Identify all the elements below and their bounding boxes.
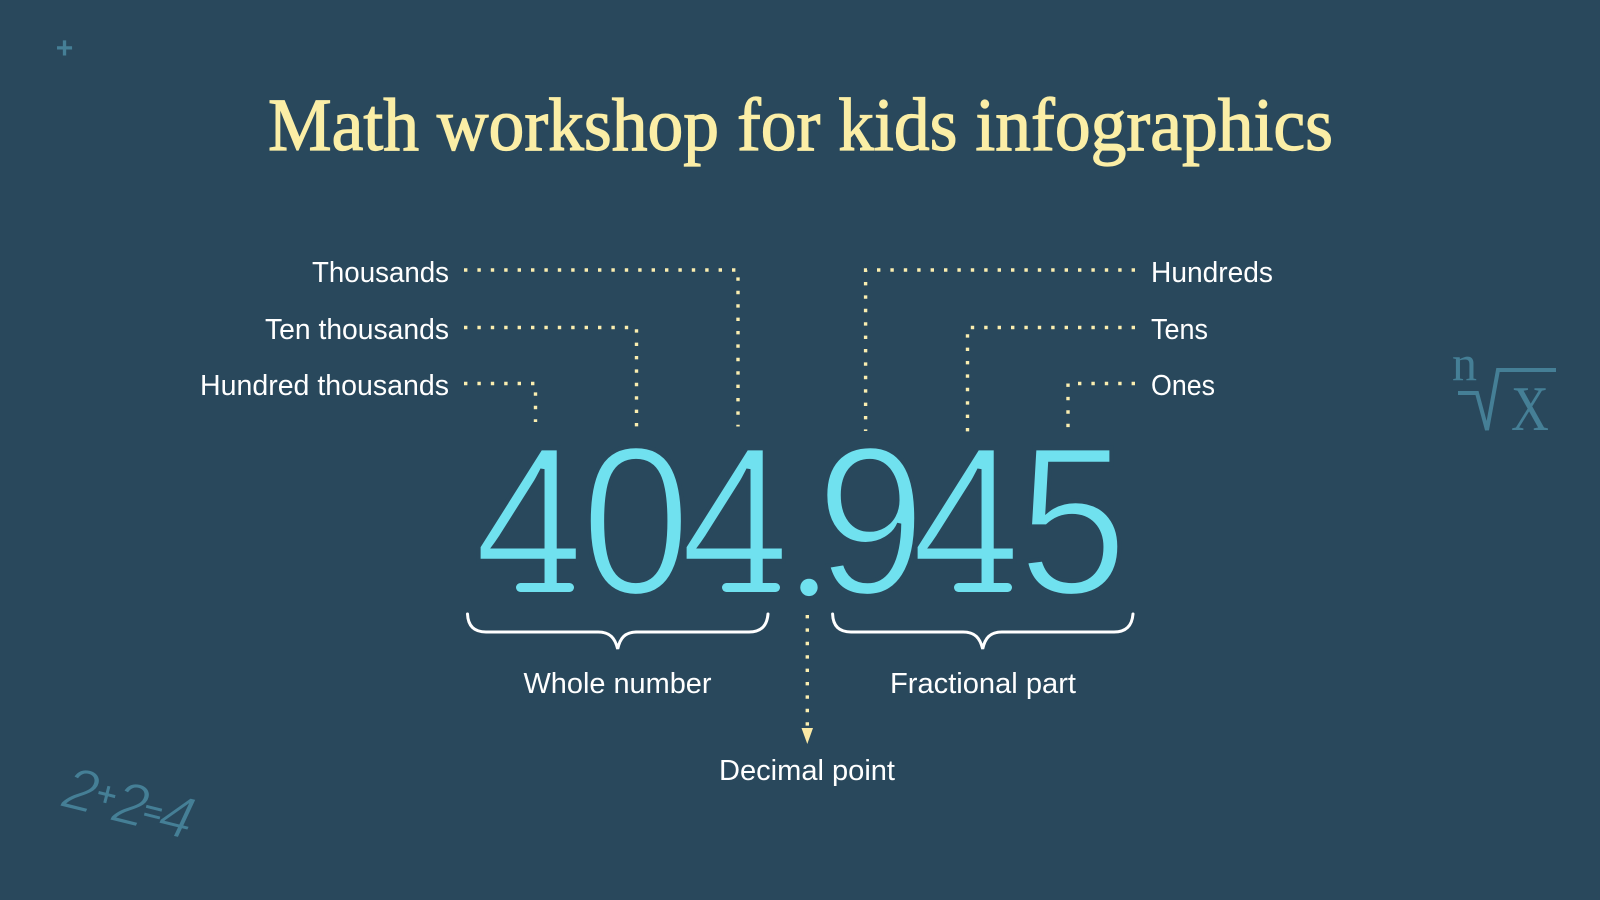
title: Math workshop for kids infographics (268, 84, 1333, 167)
big number 404.945: 5 (1018, 403, 1128, 640)
big number 404.945: 4 (680, 403, 790, 640)
brace: fractional part (833, 614, 1133, 649)
arrow: decimal point (802, 615, 813, 744)
icon: 2+2=4 decoration (56, 753, 201, 853)
label: ones: Ones (1151, 370, 1215, 402)
label: hundreds (866, 257, 1273, 431)
label: tens: Tens (1151, 314, 1208, 346)
icon: 2+2=4 decoration: + (92, 774, 121, 816)
label: decimal point: Decimal point (719, 755, 895, 787)
label: fractional part: Fractional part (890, 668, 1076, 700)
icon: nth root decoration: n (1452, 335, 1477, 391)
icon: nth root decoration: X (1511, 373, 1549, 444)
icon: 2+2=4 decoration: 4 (153, 780, 201, 853)
big number 404.945: . (791, 463, 827, 626)
big number 404.945: 4 (911, 403, 1021, 640)
icon: nth root decoration (1452, 335, 1556, 444)
label: ten thousands (265, 314, 636, 427)
icon: 2+2=4 decoration: 2 (106, 767, 155, 841)
icon: plus decoration: + (56, 32, 73, 65)
label group: whole number places (200, 257, 738, 427)
label: hundreds: Hundreds (1151, 257, 1273, 289)
label: whole number: Whole number (524, 668, 712, 700)
label: ten thousands: Ten thousands (265, 314, 449, 346)
icon: 2+2=4 decoration: 2 (56, 753, 105, 827)
label: ones (1068, 370, 1215, 428)
label: thousands: Thousands (312, 257, 449, 289)
label: tens (968, 314, 1208, 432)
label: hundred thousands (200, 370, 536, 422)
big number 404.945: 0 (581, 403, 691, 640)
icon: 2+2=4 decoration: = (139, 792, 166, 831)
big number 404.945: 4 (474, 403, 584, 640)
label group: fractional places (866, 257, 1273, 432)
brace: whole number (468, 614, 768, 649)
label: thousands (312, 257, 738, 426)
big number 404.945 (474, 403, 1128, 640)
big number 404.945: 9 (816, 403, 926, 640)
label: hundred thousands: Hundred thousands (200, 370, 449, 402)
